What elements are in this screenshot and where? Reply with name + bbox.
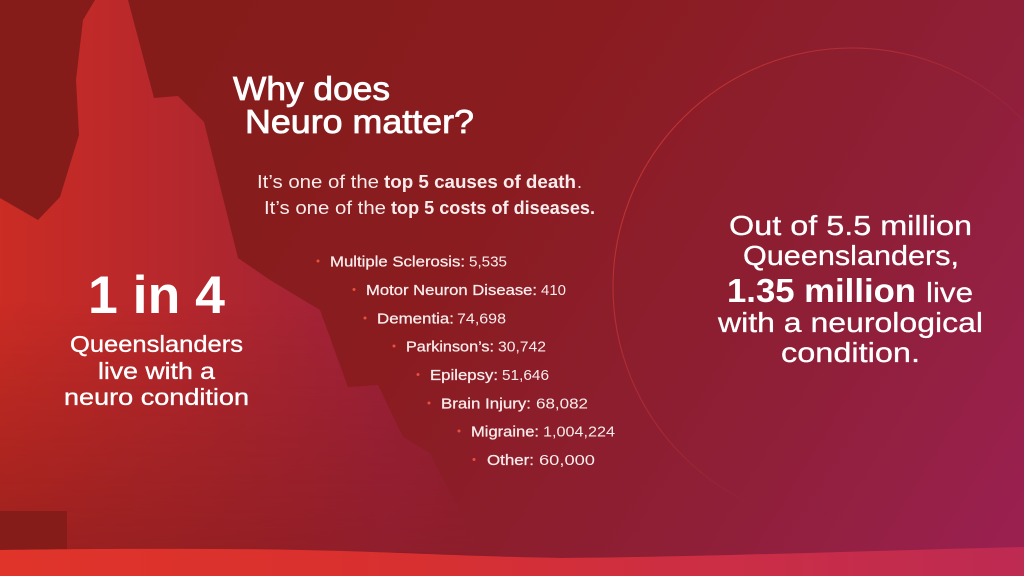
Brain Injury	[428, 396, 588, 412]
Motor Neuron Disease: 410	[541, 283, 566, 299]
circle statement: with a neurological	[717, 307, 983, 338]
intro text: It’s one of the	[264, 198, 386, 218]
stat caption	[64, 331, 249, 410]
circle statement: 1.35 million	[727, 272, 916, 309]
stat caption: neuro condition	[64, 384, 249, 410]
circle statement: Out of 5.5 million	[729, 210, 972, 241]
Other: Other:	[487, 453, 534, 469]
circle statement: live	[926, 277, 973, 308]
Motor Neuron Disease	[352, 283, 566, 299]
Migraine: Migraine:	[471, 424, 539, 440]
Parkinson's: Parkinson’s:	[406, 340, 494, 356]
Queensland map silhouette	[0, 0, 432, 550]
Migraine: 1,004,224	[543, 424, 615, 440]
intro text: It’s one of the	[257, 172, 379, 192]
Epilepsy: Epilepsy:	[430, 368, 498, 384]
Dementia	[364, 312, 506, 328]
condition list	[316, 254, 615, 469]
bottom band	[0, 547, 1024, 576]
circle outline	[613, 48, 1024, 526]
title: Neuro matter?	[245, 103, 474, 140]
stat caption: Queenslanders	[70, 331, 243, 357]
Brain Injury: Brain Injury:	[441, 396, 531, 412]
Motor Neuron Disease: Motor Neuron Disease:	[366, 283, 537, 299]
stat caption: live with a	[98, 358, 215, 384]
Parkinson's: 30,742	[498, 340, 546, 356]
stat: 1 in 4: 1 in 4	[88, 266, 226, 325]
intro text: .	[577, 172, 582, 192]
title: Why does	[233, 70, 390, 107]
Other	[472, 453, 595, 469]
title	[233, 70, 474, 140]
Multiple Sclerosis	[316, 254, 507, 270]
circle statement	[717, 210, 983, 368]
Epilepsy	[416, 368, 549, 384]
Multiple Sclerosis: 5,535	[469, 254, 507, 270]
Other: 60,000	[539, 453, 595, 469]
Epilepsy: 51,646	[502, 368, 549, 384]
Brain Injury: 68,082	[536, 396, 588, 412]
intro text: top 5 causes of death	[384, 172, 576, 192]
Migraine	[458, 424, 615, 440]
circle statement: condition.	[781, 337, 920, 368]
intro text	[257, 172, 595, 218]
dark rectangle lower left	[0, 511, 67, 551]
circle statement: Queenslanders,	[743, 240, 959, 271]
Dementia: Dementia:	[377, 312, 454, 328]
intro text: top 5 costs of diseases.	[391, 198, 595, 218]
Multiple Sclerosis: Multiple Sclerosis:	[330, 254, 465, 270]
Parkinson's	[392, 340, 546, 356]
Dementia: 74,698	[457, 312, 506, 328]
